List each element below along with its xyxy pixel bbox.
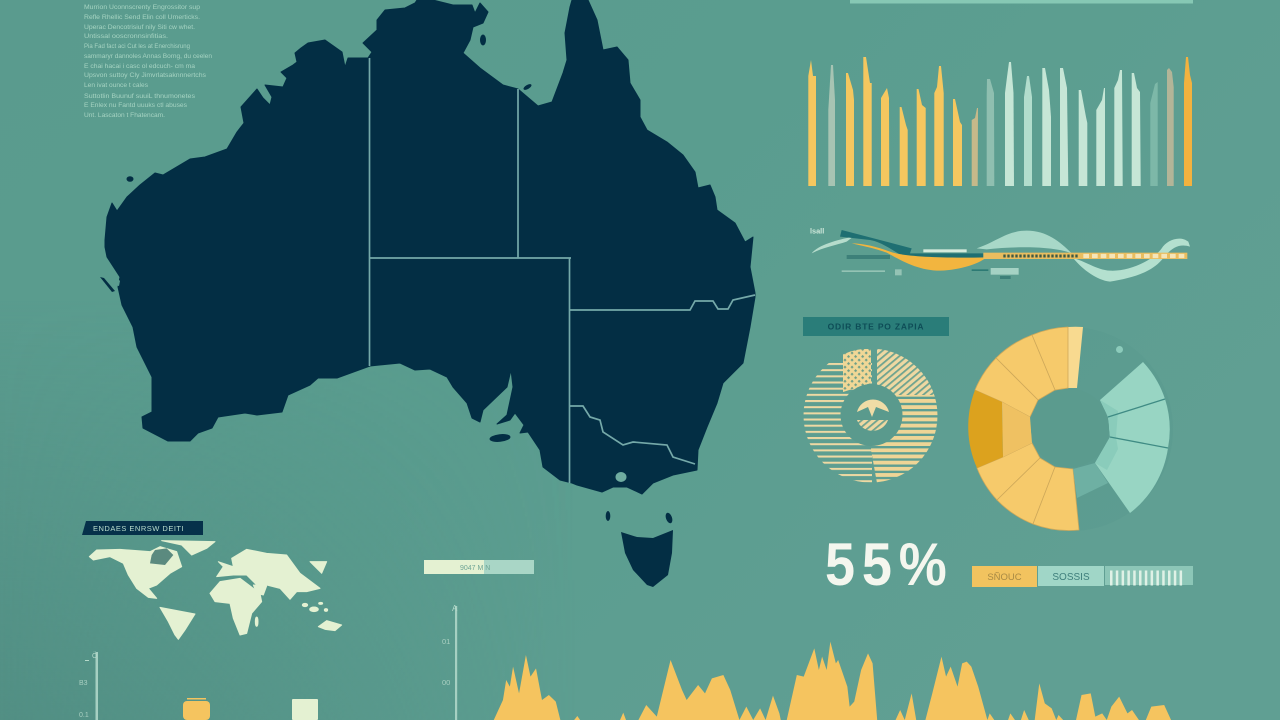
Port Phillip Bay bbox=[616, 472, 626, 482]
segmented donut chart bbox=[968, 327, 1173, 531]
small wave label: lsall bbox=[810, 226, 824, 235]
world map panel bbox=[82, 521, 342, 639]
axis for area chart bbox=[442, 604, 458, 720]
small key label bbox=[424, 560, 534, 574]
map: Australia bbox=[100, 0, 755, 587]
mainland silhouette bbox=[105, 0, 755, 494]
pale bar bbox=[292, 699, 318, 720]
text block: intro paragraph: Uperac Dencotrisiuf nily Siti cw whet. bbox=[84, 24, 195, 31]
section label bbox=[803, 317, 949, 336]
section label: ODIR BTE PO ZAPIA bbox=[828, 322, 924, 332]
text block: intro paragraph: Pia Fad fact aci Cut les at Enerchisrung bbox=[84, 43, 190, 50]
text block: intro paragraph: Untissal ooscronnsinfitias. bbox=[84, 33, 168, 40]
text block: intro paragraph: Unt. Lascaton t Fhatencam. bbox=[84, 112, 165, 119]
axis for area chart: 01 bbox=[442, 637, 450, 646]
yellow segments bbox=[975, 327, 1083, 531]
state borders bbox=[370, 58, 755, 483]
lower pale wave bbox=[1073, 239, 1190, 282]
text block: intro paragraph: E Enlex nu Fantd uuuks ctl abuses bbox=[84, 102, 188, 109]
right thick stripes bbox=[871, 395, 938, 483]
legend: SOSSIS bbox=[1052, 572, 1090, 583]
area chart bbox=[494, 642, 1171, 720]
text block: intro paragraph: Upsvon suttoy Cly Jimvrlatsaknnnertchs bbox=[84, 72, 207, 79]
top right strip bbox=[850, 0, 1193, 4]
dotted wedge bbox=[843, 349, 871, 392]
islands bbox=[126, 34, 674, 524]
continents bbox=[89, 541, 342, 639]
left bar chart: B3 bbox=[79, 680, 88, 687]
text block: intro paragraph: Murrion Uconnscrenty Engrossitor sup bbox=[84, 4, 200, 11]
wave chart bbox=[810, 226, 1190, 282]
hatched wedge bbox=[877, 349, 938, 395]
text block: intro paragraph: Suttotlin Buunuf suuiL thnumonetes bbox=[84, 93, 196, 100]
left bar chart bbox=[79, 652, 318, 720]
highlighted dark segment bbox=[968, 390, 1003, 468]
legend bbox=[972, 566, 1193, 587]
dashed band bbox=[983, 253, 1187, 259]
mint segments bbox=[1095, 362, 1170, 513]
tan and grey-green bars bbox=[828, 65, 835, 186]
text block: intro paragraph: Len ivat ounce t cales bbox=[84, 82, 149, 89]
left bar chart: Ö bbox=[92, 652, 98, 660]
Shark Bay detail bbox=[100, 277, 115, 292]
left thin stripes bbox=[803, 363, 872, 483]
left bar chart: 0.1 bbox=[79, 712, 89, 719]
pale left wing bbox=[812, 237, 853, 253]
Tasmania bbox=[621, 530, 673, 587]
legend: SÑOUC bbox=[987, 572, 1022, 583]
bar chart: spiked bars bbox=[808, 57, 1192, 186]
small pale bar bbox=[923, 249, 967, 252]
yellow ribbon bbox=[852, 243, 987, 271]
disc centre icon bbox=[857, 400, 889, 417]
pattern disc chart bbox=[803, 349, 938, 483]
axis for area chart: A bbox=[452, 604, 458, 613]
text block: intro paragraph: Refle Rhellic Send Elin coll Umerticks. bbox=[84, 14, 200, 21]
yellow bars bbox=[808, 57, 962, 186]
text block: intro paragraph bbox=[84, 4, 212, 119]
yellow bar bbox=[183, 698, 210, 720]
background bbox=[0, 514, 238, 720]
upper pale wave bbox=[977, 231, 1072, 253]
text block: intro paragraph: E chai hacai i casc ol edcuch- cm ma bbox=[84, 63, 195, 70]
world map label: ENDAES ENRSW DEITI bbox=[93, 524, 184, 533]
axis for area chart: 00 bbox=[442, 678, 450, 687]
dark teal ribbon bbox=[840, 230, 983, 258]
world map label bbox=[82, 521, 203, 535]
wave captions bbox=[847, 255, 890, 259]
headline stat: 55% bbox=[825, 531, 947, 599]
mint bars bbox=[1005, 62, 1141, 186]
text block: intro paragraph: sammaryr dannoles Annas Borng, du ceelen bbox=[84, 53, 212, 60]
small key label: 9047 M N bbox=[460, 565, 490, 572]
